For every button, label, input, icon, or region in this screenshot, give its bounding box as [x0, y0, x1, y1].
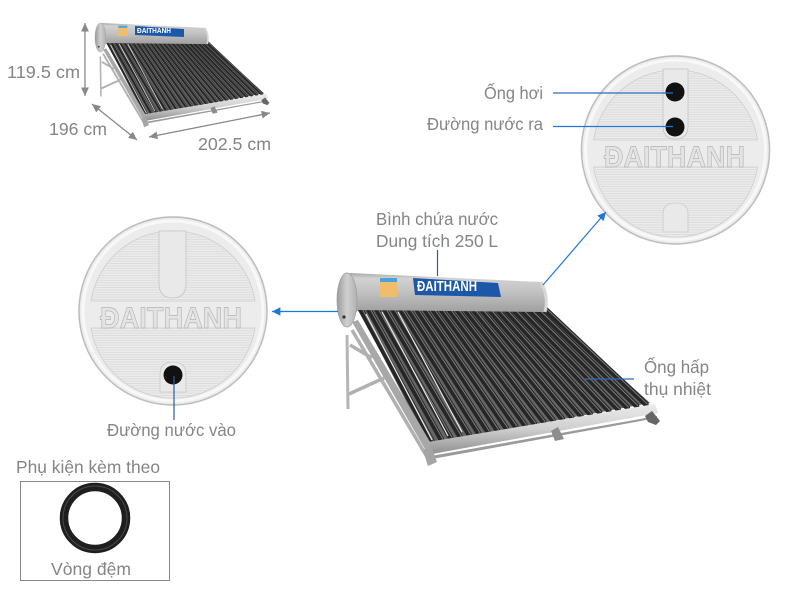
label: tank and capacity: Dung tích 250 L: [376, 231, 498, 251]
label: water outlet: Đường nước ra: [427, 114, 543, 134]
height label: 119.5 cm: [7, 62, 80, 82]
embossed brand name: ĐAITHANH: [604, 141, 745, 174]
icon: gasket ring: [63, 486, 127, 550]
upper channel with holes: [663, 69, 688, 139]
leader line: tank: [436, 250, 438, 276]
arrow: tank to left disc: [272, 310, 338, 312]
leader line: water outlet: [553, 126, 673, 128]
main water heater: [337, 273, 660, 466]
label: absorber tubes: thụ nhiệt: [644, 379, 711, 399]
thumbnail brand badge: ĐAITHANH: [137, 26, 171, 35]
embossed brand name: ĐAITHANH: [100, 302, 242, 335]
thumbnail brand badge: [135, 26, 184, 37]
thumbnail heater body: [95, 23, 269, 127]
label: steam pipe: Ống hơi: [484, 82, 543, 103]
dimension arrow: width: [149, 113, 270, 137]
leader line: water inlet: [173, 376, 175, 420]
brand badge: ĐAITHANH: [417, 278, 477, 295]
label: tank and capacity: Bình chứa nước: [376, 209, 498, 229]
water inlet hole: [164, 366, 182, 384]
steam outlet hole: [666, 82, 684, 102]
panel: accessories: [20, 482, 170, 580]
dimension arrow: depth: [92, 104, 137, 140]
width label: 202.5 cm: [198, 134, 271, 154]
lower notch: [663, 203, 688, 232]
dimension arrow: height: [84, 23, 86, 96]
depth label: 196 cm: [49, 119, 107, 139]
label: tank and capacity: [376, 209, 498, 251]
left tank end disc: [78, 216, 268, 406]
label: absorber tubes: [644, 356, 711, 399]
right tank end disc: [580, 55, 770, 245]
arrow: tank to right disc: [543, 212, 606, 285]
label: absorber tubes: Ống hấp: [644, 356, 709, 377]
heading: accessories: Phụ kiện kèm theo: [16, 457, 160, 477]
leader line: steam outlet: [553, 92, 673, 94]
leader line: absorber tubes: [585, 378, 634, 380]
lower notch with inlet: [160, 362, 186, 392]
main heater body: [337, 273, 660, 466]
water outlet hole: [666, 118, 684, 136]
thumbnail: water heater with dimensions: [7, 23, 271, 154]
label: gasket: Vòng đệm: [51, 559, 131, 579]
upper channel: [159, 231, 186, 298]
label: water inlet: Đường nước vào: [107, 420, 236, 440]
